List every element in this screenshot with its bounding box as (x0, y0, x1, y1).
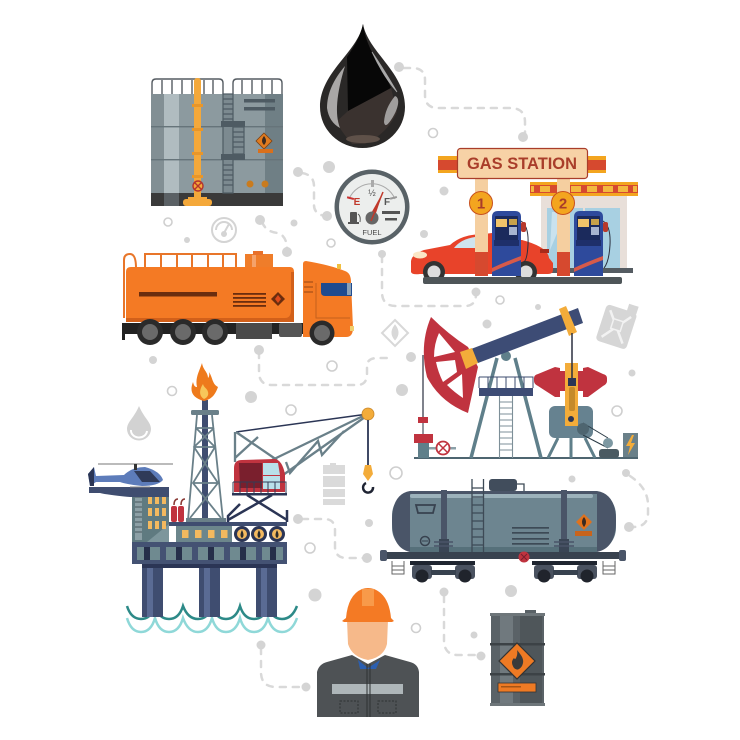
gauge labels: E (354, 197, 361, 208)
hard hat (342, 588, 394, 622)
pump number 1: 1 (477, 196, 485, 212)
pumpjack horse head (424, 317, 478, 413)
oil worker (317, 588, 419, 717)
oil drop (320, 24, 405, 148)
crane (228, 408, 374, 522)
sign posts (475, 179, 570, 276)
icon: gray mini fuel gauge (212, 218, 236, 242)
icon: gray jerrycan (595, 297, 640, 350)
helicopter (88, 464, 173, 487)
mid deck rooms (169, 522, 287, 542)
well head (414, 417, 456, 458)
oil barrel (490, 610, 545, 706)
gas station sign (458, 148, 588, 178)
electric box (623, 433, 638, 457)
main deck (132, 542, 287, 564)
sign side bands (438, 156, 606, 173)
crane supports (228, 495, 287, 522)
bogies (410, 561, 597, 582)
station building (530, 182, 638, 268)
barrel hazard sign (498, 643, 536, 692)
drilling derrick (186, 400, 226, 522)
rail tank car (380, 479, 626, 582)
tank hazard sign (256, 133, 273, 153)
platform columns (142, 564, 277, 617)
tank car ladder (472, 479, 484, 553)
belt drive and motor (577, 423, 619, 458)
face (347, 620, 388, 660)
crane cabin (232, 459, 287, 496)
pump number 2: 2 (559, 196, 567, 212)
gauge pump icon (348, 212, 360, 224)
storage tank (151, 78, 283, 206)
dashed connectors and scattered dots (149, 62, 648, 692)
tank car hatch (489, 479, 524, 491)
helipad (89, 487, 169, 497)
gauge needle (366, 192, 383, 224)
truck wheels (137, 319, 334, 346)
offshore oil platform (88, 363, 374, 632)
red car (411, 233, 553, 283)
tank ladders (223, 94, 244, 193)
oil pumpjack (414, 306, 638, 459)
pump number 2 (552, 192, 574, 214)
pump number 1 (470, 192, 492, 214)
fuel gauge: F (384, 197, 390, 208)
fuel gauge: FUEL (362, 228, 382, 237)
fuel tanker truck (122, 251, 354, 346)
icon: gray oil drop (127, 406, 151, 440)
accommodation building (132, 487, 169, 542)
orange clamps (460, 306, 577, 369)
chassis (380, 550, 626, 574)
gearbox and supports (548, 406, 595, 458)
gas station sign: GAS STATION (467, 155, 577, 173)
fuel pump 1 (492, 211, 528, 276)
orange pipe with valve (183, 78, 212, 206)
truck cab (303, 261, 354, 337)
pumpjack frame (471, 358, 541, 458)
fuel gauge (334, 170, 410, 244)
counterweights (534, 367, 607, 397)
pumpjack beam (471, 308, 583, 363)
gas flare flame (191, 363, 218, 401)
fuel pump 2 (574, 211, 610, 276)
icon: gray barrel (322, 463, 346, 505)
jacket (317, 655, 419, 717)
gas station (411, 148, 638, 284)
crank arm (565, 333, 578, 426)
sea waves (127, 606, 297, 632)
red gas tanks (171, 499, 185, 522)
fuel gauge: ½ (368, 188, 376, 198)
tank car hazard sign (575, 514, 592, 536)
icon: gray flammable diamond (382, 320, 408, 346)
